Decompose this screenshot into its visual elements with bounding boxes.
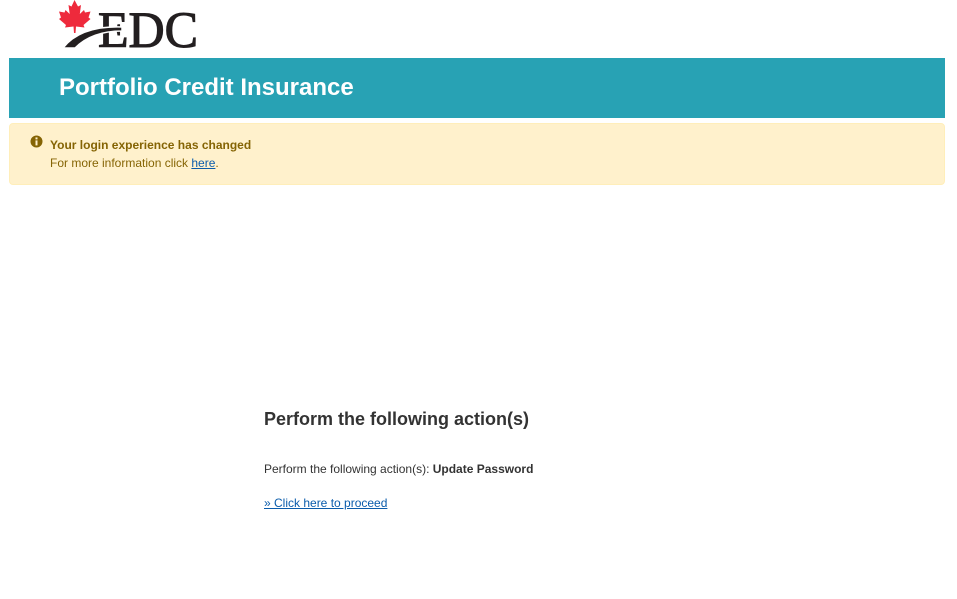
alert heading: Your login experience has changed	[50, 138, 251, 152]
action text: Perform the following action(s): Update Password	[264, 462, 533, 476]
alert body text: For more information click here.	[50, 156, 219, 170]
header banner	[9, 58, 945, 118]
heading: perform actions: Perform the following action(s)	[264, 409, 529, 429]
alert panel: login notice	[9, 123, 945, 185]
logo: EDC with maple leaf	[59, 0, 198, 52]
logo swoosh	[63, 27, 122, 48]
icon: info circle	[30, 136, 42, 148]
icon: red maple leaf	[59, 0, 90, 33]
proceed link: » Click here to proceed	[264, 496, 387, 510]
banner title: Portfolio Credit Insurance	[59, 74, 354, 101]
